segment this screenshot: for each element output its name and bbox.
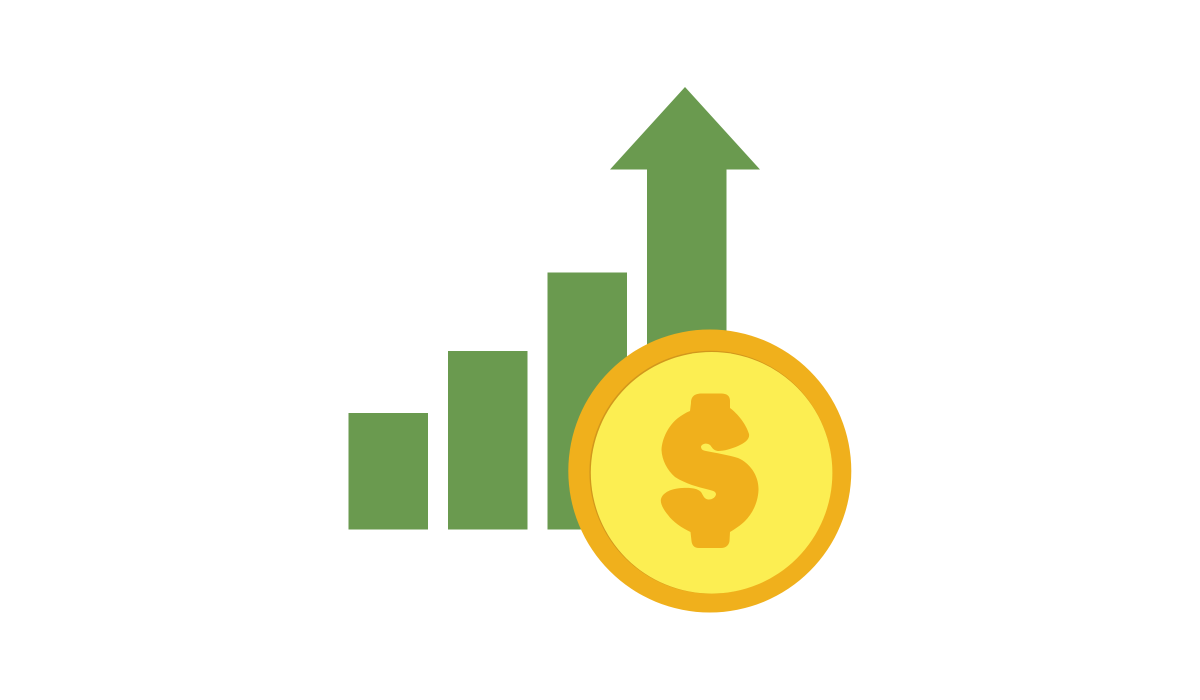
arrow: green upward arrow bbox=[610, 87, 760, 400]
icon: gold dollar coin bbox=[568, 330, 851, 612]
coin outer rim bbox=[568, 330, 851, 612]
bar 1 bbox=[348, 413, 428, 530]
bar 2 bbox=[448, 351, 528, 530]
icon: dollar sign bbox=[661, 394, 759, 548]
coin yellow face bbox=[591, 352, 832, 594]
bar 3 bbox=[548, 272, 627, 530]
coin inner shadow bbox=[589, 351, 832, 594]
bar chart: three rising green bars bbox=[348, 272, 627, 530]
